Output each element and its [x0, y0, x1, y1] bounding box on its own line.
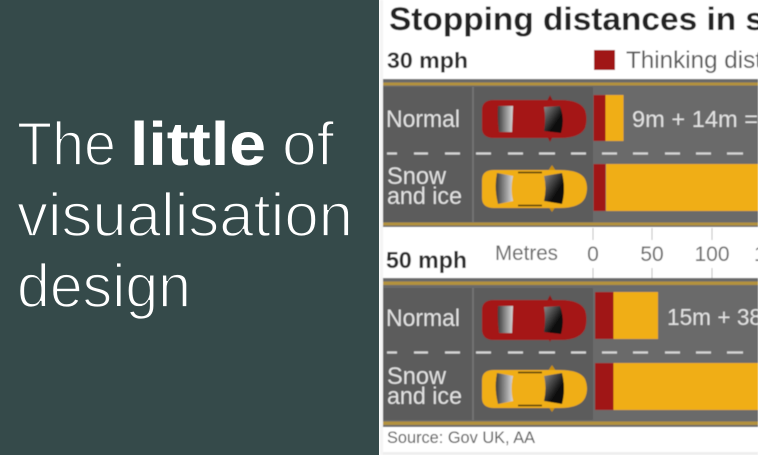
legend: thinking distance: Thinking dist [626, 47, 758, 74]
panel: title background [0, 0, 379, 455]
icon: yellow car [482, 365, 587, 412]
row label: Snow and ice: Snow [387, 363, 447, 390]
icon: red car [482, 295, 586, 342]
row label: Snow and ice: and ice [387, 183, 462, 210]
icon: red car [482, 95, 586, 142]
value: 9m + 14m: 9m + 14m = [632, 106, 758, 132]
row label: Snow and ice [387, 163, 462, 210]
road: 50 mph [383, 278, 758, 427]
row label: Snow and ice: and ice [387, 383, 462, 410]
axis: metres scale [495, 228, 758, 278]
bar: snow and ice 30 mph [594, 164, 758, 211]
row label: Normal: Normal [386, 305, 460, 332]
road: 30 mph [383, 79, 758, 227]
row label: Snow and ice: Snow [387, 163, 447, 190]
heading: 50 mph: 50 mph [386, 247, 467, 273]
heading: The little of visualisation design [17, 110, 353, 320]
heading: The little of visualisation design: little [130, 110, 266, 178]
panel: stopping distances chart [380, 0, 758, 455]
bar: snow and ice 50 mph [595, 363, 758, 410]
row label: Snow and ice [387, 363, 462, 410]
row label: Normal: Normal [386, 106, 460, 133]
heading: The little of visualisation design: of [282, 110, 335, 178]
icon: yellow car [482, 165, 587, 212]
axis: metres scale: Metres [495, 242, 558, 265]
heading: The little of visualisation design: visualisation [17, 181, 353, 249]
axis: metres scale: 100 [694, 243, 730, 266]
axis: metres scale: 0 [587, 243, 599, 266]
heading: The little of visualisation design: The [17, 110, 116, 178]
heading: 30 mph: 30 mph [387, 48, 468, 73]
bar: normal 30 mph [594, 95, 624, 141]
chart title: Stopping distances in s [389, 1, 758, 37]
source note: Source: Gov UK, AA [387, 429, 535, 447]
bar: normal 50 mph [595, 292, 658, 339]
heading: The little of visualisation design: design [17, 252, 191, 320]
axis: metres scale: 50 [640, 243, 664, 266]
